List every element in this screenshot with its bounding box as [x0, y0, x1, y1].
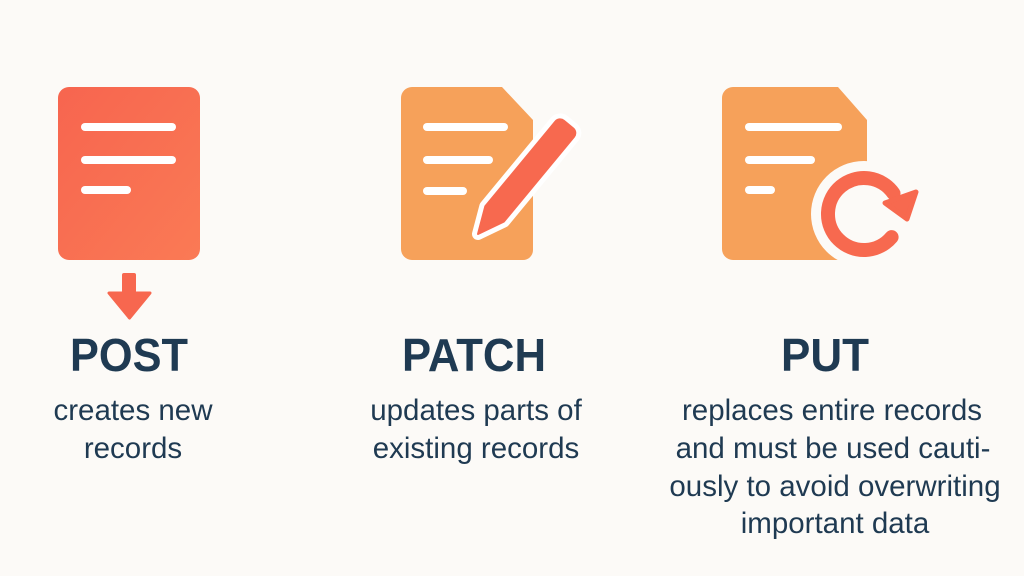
icon: down arrow	[109, 273, 150, 318]
text: PUT description: and must be used cauti-	[676, 432, 990, 465]
text: PUT description: ously to avoid overwriting	[669, 470, 1001, 503]
text: PATCH description: existing records	[373, 432, 579, 465]
text: PUT description: replaces entire records	[682, 394, 982, 427]
icon: pencil	[469, 117, 578, 242]
heading: POST: POST	[70, 329, 188, 381]
icon: POST document	[58, 87, 200, 260]
icon: PUT document with refresh	[722, 87, 917, 267]
icon: refresh arrow	[828, 178, 916, 250]
heading: PUT: PUT	[781, 329, 869, 381]
heading: PATCH: PATCH	[402, 329, 546, 381]
text: POST description: records	[84, 432, 182, 465]
text: POST description: creates new	[53, 394, 213, 427]
text: PUT description: important data	[741, 507, 930, 540]
icon: PATCH document with pencil	[401, 87, 578, 260]
text: PATCH description: updates parts of	[370, 394, 583, 427]
